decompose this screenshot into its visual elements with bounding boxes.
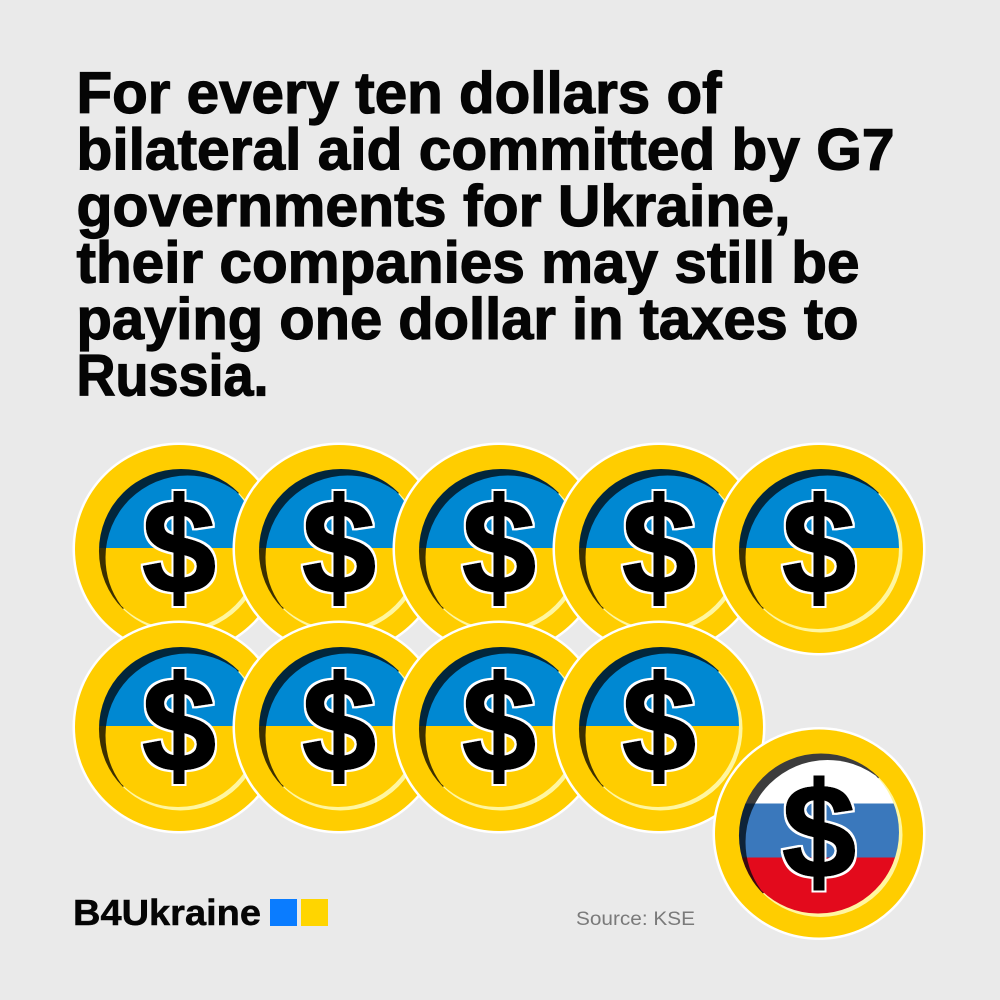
source: Source: KSE [576,909,695,930]
title: paying one dollar in taxes to [76,287,858,352]
coin 1 [72,442,286,656]
coin row: Ukrainian flag coins, top [72,442,926,656]
coin 9 [552,620,766,834]
coin 7: $ [302,651,376,800]
coin 3 [392,442,606,656]
title: their companies may still be [76,230,860,296]
Russian flag coin [712,727,926,940]
logo squares [270,899,328,926]
title [76,61,894,408]
coin 6 [72,620,286,834]
title: For every ten dollars of [76,61,722,126]
coin 7 [232,620,446,834]
logo wordmark: B4Ukraine [73,892,261,933]
title: governments for Ukraine, [76,174,790,239]
coin 2 [232,442,446,656]
coin 8 [392,620,606,834]
coin 3: $ [462,473,536,622]
coin 5: $ [782,473,856,622]
coin row: Ukrainian flag coins, bottom [72,620,766,834]
coin 2: $ [302,473,376,622]
coin 4: $ [622,473,696,622]
coin 5 [712,442,926,656]
title: Russia. [76,344,268,408]
coin 4 [552,442,766,656]
title: bilateral aid committed by G7 [76,118,894,182]
coin 9: $ [622,651,696,800]
Russian flag coin: $ [782,758,856,906]
coin 1: $ [142,473,216,622]
coin 6: $ [142,651,216,800]
coin 8: $ [462,651,536,800]
